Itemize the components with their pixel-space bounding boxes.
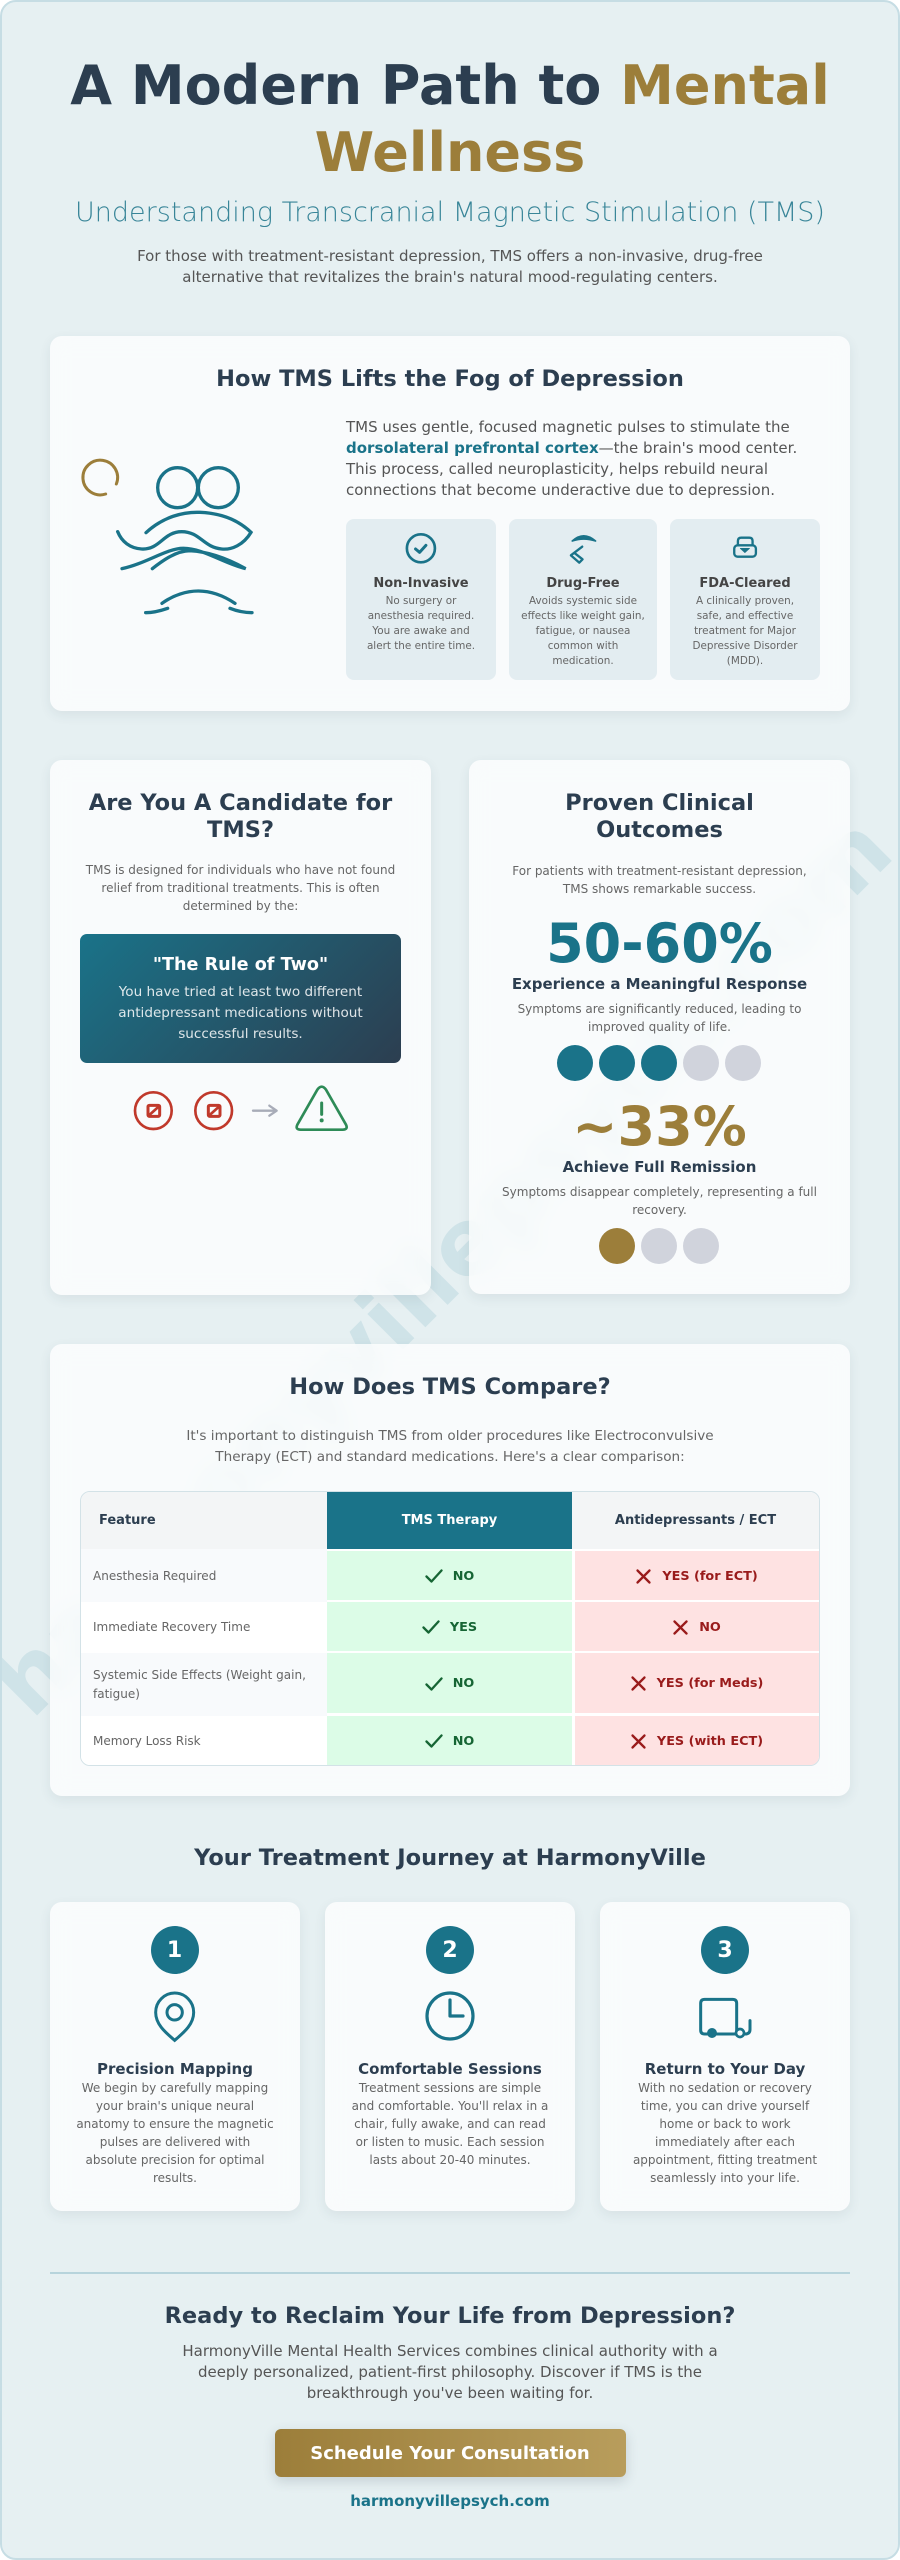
step number 3: 3 — [717, 1938, 733, 1962]
row label: recovery — [81, 1602, 327, 1653]
text: FDA-cleared: (MDD). — [727, 655, 763, 667]
heading: call to action: Ready to Reclaim Your Life from Depression? — [165, 2303, 735, 2329]
TMS value: side effects — [327, 1653, 572, 1713]
step number 1: 1 — [167, 1938, 182, 1962]
icon: map pin — [154, 1992, 196, 2042]
arrow — [253, 1106, 277, 1116]
step 1 text: anatomy to ensure the magnetic — [76, 2116, 274, 2130]
body text: dorsolateral prefrontal cortex — [346, 418, 797, 548]
row label: anesthesia — [81, 1549, 327, 1602]
icon row: two failed medications lead to TMS — [134, 1085, 348, 1131]
other value: recovery: NO — [699, 1620, 721, 1634]
other value: side effects — [575, 1653, 819, 1713]
text: comparison intro: Therapy (ECT) and standard medications. Here's a clear comparison: — [215, 1448, 685, 1464]
step 3 text: time, you can drive yourself — [641, 2098, 809, 2112]
callout text: antidepressant medications without — [118, 1005, 363, 1021]
text: non-invasive: You are awake and — [372, 625, 470, 637]
feature card: drug-free — [509, 519, 657, 680]
step 3 text: immediately after each — [655, 2134, 795, 2148]
label: non-invasive: Non-Invasive — [373, 576, 469, 590]
TMS value: memory: NO — [453, 1734, 474, 1748]
icon: warning triangle — [297, 1087, 347, 1130]
callout title: "The Rule of Two" — [153, 954, 328, 974]
text: call to action: deeply personalized, patient-first philosophy. Discover if TMS is the — [198, 2363, 702, 2381]
step 2 text: lasts about 20-40 minutes. — [369, 2152, 531, 2166]
text: non-invasive — [367, 595, 475, 652]
title: A Modern Path to Mental — [70, 54, 830, 117]
row label: side effects — [81, 1653, 327, 1716]
TMS value: anesthesia: NO — [453, 1568, 474, 1584]
title: Wellness — [315, 121, 585, 184]
stat text: remission — [502, 1185, 817, 1217]
callout text: successful results. — [178, 1026, 303, 1042]
intro text — [137, 246, 763, 286]
step 1 text: pulses are delivered with — [100, 2134, 250, 2148]
label: FDA-cleared: FDA-Cleared — [699, 576, 791, 590]
step 3 text: With no sedation or recovery — [638, 2080, 812, 2094]
panel: step 1 — [50, 1902, 300, 2211]
feature card: FDA-cleared — [670, 519, 820, 680]
TMS value: recovery: YES — [450, 1620, 477, 1634]
text: candidate intro — [86, 863, 395, 913]
body text: dorsolateral prefrontal cortex: dorsolateral prefrontal cortex—the brain's mood center. — [346, 438, 797, 456]
heading: candidate — [88, 790, 392, 1126]
text: drug-free: fatigue, or nausea — [536, 625, 630, 637]
heading: treatment journey: Your Treatment Journey at HarmonyVille — [194, 1845, 706, 1871]
icon: brain and coil illustration — [81, 458, 254, 614]
step 2 text: Treatment sessions are simple — [359, 2080, 541, 2094]
step 3 text: seamlessly into your life. — [650, 2170, 800, 2184]
stat text: response: Symptoms are significantly reduced, leading to — [518, 1002, 801, 1016]
other value: memory — [575, 1716, 819, 1765]
link: website: harmonyvillepsych.com — [350, 2492, 550, 2510]
text: FDA-cleared — [692, 595, 798, 667]
step 1 text: We begin by carefully mapping — [82, 2080, 268, 2094]
feature card: non-invasive — [346, 519, 496, 680]
icon: failed medication one — [135, 1092, 172, 1129]
heading: how TMS lifts the fog: How TMS Lifts the Fog of Depression — [216, 366, 684, 392]
heading: candidate: TMS? — [207, 816, 274, 842]
text: non-invasive: No surgery or — [386, 595, 456, 607]
icon: check circle — [406, 533, 436, 564]
text: candidate intro: relief from traditional treatments. This is often — [101, 881, 380, 895]
TMS value: memory — [327, 1716, 572, 1765]
step number 3 — [701, 1926, 749, 1974]
body text: dorsolateral prefrontal cortex: TMS uses gentle, focused magnetic pulses to stimulate the — [346, 418, 790, 436]
text: candidate intro: determined by the: — [183, 899, 298, 913]
step 3 title: Return to Your Day — [645, 2060, 805, 2078]
panel: comparison — [50, 1344, 850, 1796]
button: schedule: Schedule Your Consultation — [310, 2443, 590, 2464]
pictogram: three of five — [557, 1045, 761, 1081]
other value: memory: YES (with ECT) — [657, 1734, 763, 1748]
header — [70, 54, 830, 286]
step 2 text: or listen to music. Each session — [356, 2134, 544, 2148]
table header: antidepressants: Antidepressants / ECT — [615, 1513, 776, 1528]
row label: recovery: Immediate Recovery Time — [93, 1620, 250, 1634]
body text: dorsolateral prefrontal cortex: This process, called neuroplasticity, helps rebuild neural — [346, 460, 768, 478]
stat: 33%: ~33% — [572, 1095, 747, 1158]
step 3 text: home or back to work — [659, 2116, 791, 2130]
row label: anesthesia: Anesthesia Required — [93, 1568, 216, 1582]
subtitle: Understanding Transcranial Magnetic Stimulation (TMS) — [75, 197, 825, 228]
stat label: meaningful response: Experience a Meaningful Response — [512, 975, 807, 993]
stat text: remission: Symptoms disappear completely, representing a full — [502, 1185, 817, 1199]
TMS value: recovery — [327, 1602, 572, 1651]
step number 2 — [426, 1926, 474, 1974]
text: non-invasive: alert the entire time. — [367, 640, 475, 652]
heading: clinical outcomes — [565, 790, 754, 1238]
icon: clock — [425, 1991, 475, 2041]
text: drug-free: medication. — [552, 655, 614, 667]
stat text: response — [518, 1002, 801, 1034]
panel: how TMS works — [50, 336, 850, 711]
table header: feature: Feature — [99, 1513, 156, 1528]
callout text — [118, 984, 363, 1042]
heading: candidate: Are You A Candidate for — [89, 790, 392, 816]
text: outcomes intro: For patients with treatment-resistant depression, — [512, 864, 807, 878]
body text: dorsolateral prefrontal cortex: connections that become underactive due to depression. — [346, 480, 775, 498]
TMS value: side effects: NO — [453, 1676, 474, 1691]
row label: memory — [81, 1716, 327, 1765]
text: FDA-cleared: Depressive Disorder — [692, 640, 798, 652]
text: drug-free: effects like weight gain, — [521, 610, 645, 622]
step 3 text: appointment, fitting treatment — [633, 2152, 817, 2166]
step 1 text — [76, 1926, 274, 2184]
row label: side effects: Systemic Side Effects (Weight gain, — [93, 1668, 306, 1682]
other value: recovery — [575, 1602, 819, 1651]
table header: TMS therapy: TMS Therapy — [402, 1513, 497, 1528]
heading: clinical outcomes: Proven Clinical — [565, 790, 754, 816]
label: drug-free: Drug-Free — [546, 576, 620, 590]
text: comparison intro: It's important to distinguish TMS from older procedures like Electroconvulsive — [186, 1428, 714, 1444]
table header: TMS therapy — [327, 1492, 572, 1549]
text: drug-free: common with — [548, 640, 618, 652]
text: call to action: HarmonyVille Mental Health Services combines clinical authority with a — [182, 2342, 718, 2360]
step 1 title: Precision Mapping — [97, 2060, 253, 2078]
text: outcomes intro — [512, 864, 807, 896]
other value: anesthesia: YES (for ECT) — [662, 1568, 758, 1584]
stat text: remission: recovery. — [632, 1203, 687, 1217]
step 1 text: absolute precision for optimal — [85, 2152, 265, 2166]
button: schedule — [274, 2429, 626, 2477]
step 1 text: your brain's unique neural — [96, 2098, 254, 2112]
intro text: alternative that revitalizes the brain's natural mood-regulating centers. — [182, 268, 718, 286]
row label: memory: Memory Loss Risk — [93, 1734, 201, 1748]
stat: 50-60%: 50-60% — [546, 912, 773, 975]
panel: step 3 — [600, 1902, 850, 2211]
other value: side effects: YES (for Meds) — [657, 1676, 763, 1691]
icon: drug-free — [570, 535, 596, 564]
text: call to action — [182, 2342, 718, 2402]
icon: vehicle — [699, 1998, 752, 2038]
step 2 text — [352, 2080, 548, 2166]
text: outcomes intro: TMS shows remarkable success. — [563, 882, 756, 896]
panel: candidate — [50, 760, 431, 1295]
title — [70, 54, 830, 184]
stat label: full remission: Achieve Full Remission — [563, 1158, 756, 1176]
step 3 text — [633, 1926, 817, 2184]
heading: clinical outcomes: Outcomes — [596, 817, 723, 843]
row label: side effects: fatigue) — [93, 1686, 140, 1700]
callout: rule of two — [80, 934, 401, 1063]
text: FDA-cleared: A clinically proven, — [696, 595, 794, 607]
step number 1 — [150, 1926, 198, 1974]
icon: FDA-cleared — [733, 536, 758, 558]
table header: antidepressants — [572, 1492, 819, 1549]
panel: clinical outcomes — [469, 760, 850, 1294]
text: non-invasive: anesthesia required. — [368, 610, 474, 622]
step number 2: 2 — [442, 1938, 458, 1962]
step 2 title: Comfortable Sessions — [358, 2060, 542, 2078]
intro text: For those with treatment-resistant depression, TMS offers a non-invasive, drug-free — [137, 246, 763, 264]
text: candidate intro: TMS is designed for individuals who have not found — [86, 863, 395, 877]
text: FDA-cleared: treatment for Major — [694, 625, 796, 637]
panel: step 2 — [325, 1902, 574, 2211]
callout text: You have tried at least two different — [119, 984, 362, 1000]
step 1 text: results. — [153, 2170, 197, 2184]
stat text: response: improved quality of life. — [588, 1020, 731, 1034]
step 2 text: chair, fully awake, and can read — [354, 2116, 546, 2130]
text: drug-free: Avoids systemic side — [529, 595, 637, 607]
heading: comparison: How Does TMS Compare? — [289, 1374, 611, 1400]
step 2 text: and comfortable. You'll relax in a — [352, 2098, 548, 2112]
TMS value: anesthesia — [327, 1551, 572, 1600]
text: call to action: breakthrough you've been waiting for. — [307, 2384, 593, 2402]
text: FDA-cleared: safe, and effective — [697, 610, 793, 622]
other value: anesthesia — [575, 1551, 819, 1600]
icon: failed medication two — [195, 1092, 232, 1129]
pictogram: one of three — [599, 1228, 719, 1264]
text: comparison intro — [186, 1428, 714, 1464]
table header: feature — [81, 1492, 327, 1549]
text: drug-free — [521, 595, 645, 667]
comparison table — [80, 1491, 820, 1766]
